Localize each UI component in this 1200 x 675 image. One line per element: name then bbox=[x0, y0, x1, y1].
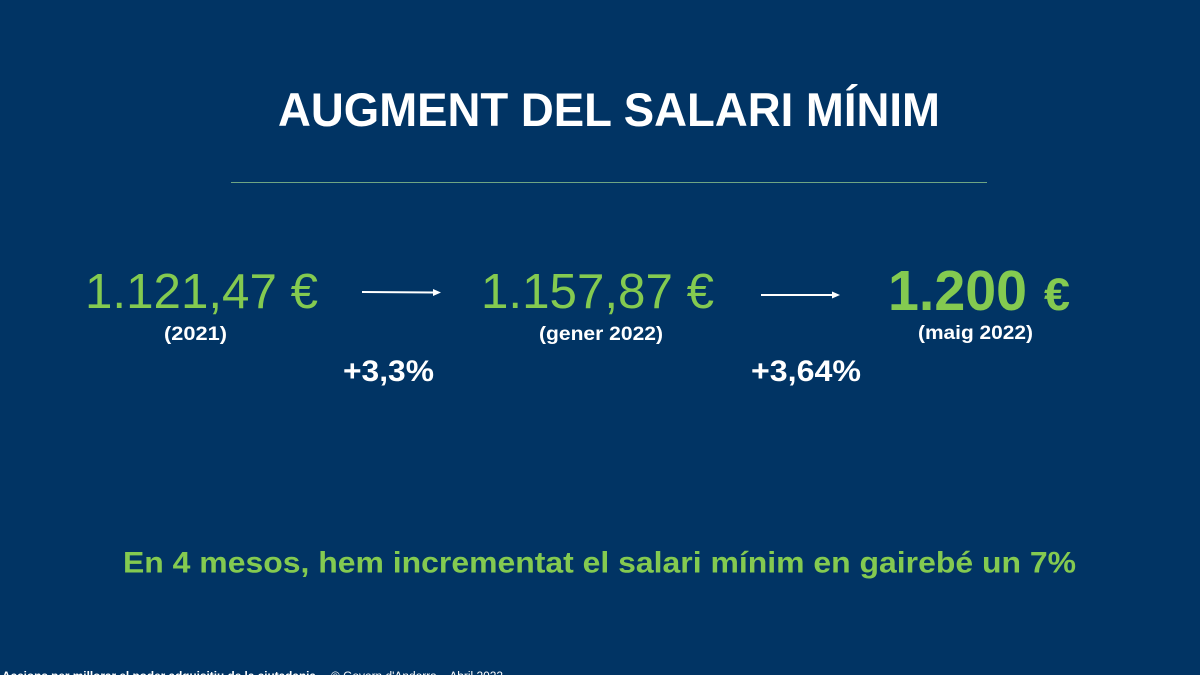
salary 2021: 1.121,47 € bbox=[85, 265, 318, 319]
salary May 2022: € bbox=[1044, 269, 1070, 320]
salary January 2022: 1.157,87 € bbox=[481, 265, 714, 319]
increase 3.64%: +3,64% bbox=[751, 355, 861, 388]
conclusion text: En 4 mesos, hem incrementat el salari mínim en gairebé un 7% bbox=[123, 546, 1076, 580]
salary 2021: (2021) bbox=[164, 324, 227, 345]
arrow: January 2022 to May 2022 bbox=[761, 292, 840, 298]
salary May 2022 bbox=[888, 259, 1070, 344]
title: AUGMENT DEL SALARI MÍNIM bbox=[278, 83, 940, 136]
salary January 2022: (gener 2022) bbox=[539, 324, 663, 345]
salary May 2022: 1.200 bbox=[888, 259, 1027, 323]
arrow: 2021 to January 2022 bbox=[362, 289, 441, 296]
salary January 2022 bbox=[481, 265, 714, 345]
footer bbox=[2, 671, 503, 675]
salary 2021 bbox=[85, 265, 318, 345]
increase 3.3%: +3,3% bbox=[343, 355, 434, 388]
salary May 2022: (maig 2022) bbox=[918, 323, 1033, 344]
